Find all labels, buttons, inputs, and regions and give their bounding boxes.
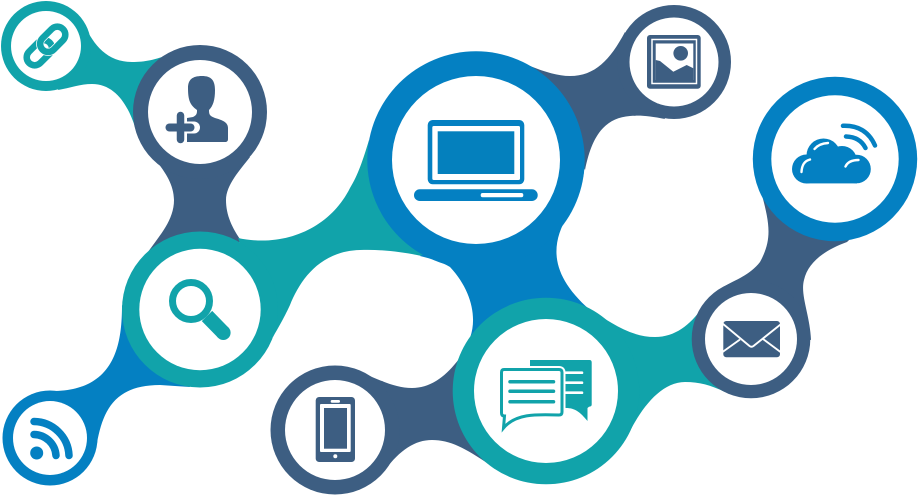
icon: laptop: [414, 120, 538, 201]
node: chat: [453, 298, 639, 484]
icon: picture frame: [647, 35, 701, 89]
icon: rss feed: [30, 422, 69, 460]
connector: user to search: [135, 127, 250, 252]
connector: search to laptop: [238, 140, 430, 337]
node: search: [122, 232, 278, 388]
icon: user plus: [170, 76, 228, 142]
connector: phone to chat: [360, 338, 490, 470]
connector: search to rss: [50, 305, 190, 443]
node: phone: [270, 366, 400, 494]
node: add user: [133, 45, 267, 179]
icon: chain link: [23, 23, 69, 69]
connector: email to cloud: [700, 195, 865, 340]
node: laptop: [367, 51, 585, 269]
icon: envelope: [722, 321, 780, 357]
icon: cloud with signal: [792, 126, 875, 184]
connector: chat to email: [588, 308, 725, 437]
connector: laptop to picture: [530, 32, 665, 170]
node: rss: [2, 390, 98, 486]
node: email: [692, 280, 810, 398]
icon: smartphone: [316, 397, 355, 462]
connector: laptop to chat: [420, 172, 590, 352]
node: picture: [617, 5, 731, 119]
connector: link to user: [58, 22, 170, 130]
node: link: [1, 1, 91, 91]
icon: magnifier: [172, 282, 231, 340]
node: cloud: [753, 77, 917, 241]
icon: chat bubbles: [502, 360, 592, 428]
